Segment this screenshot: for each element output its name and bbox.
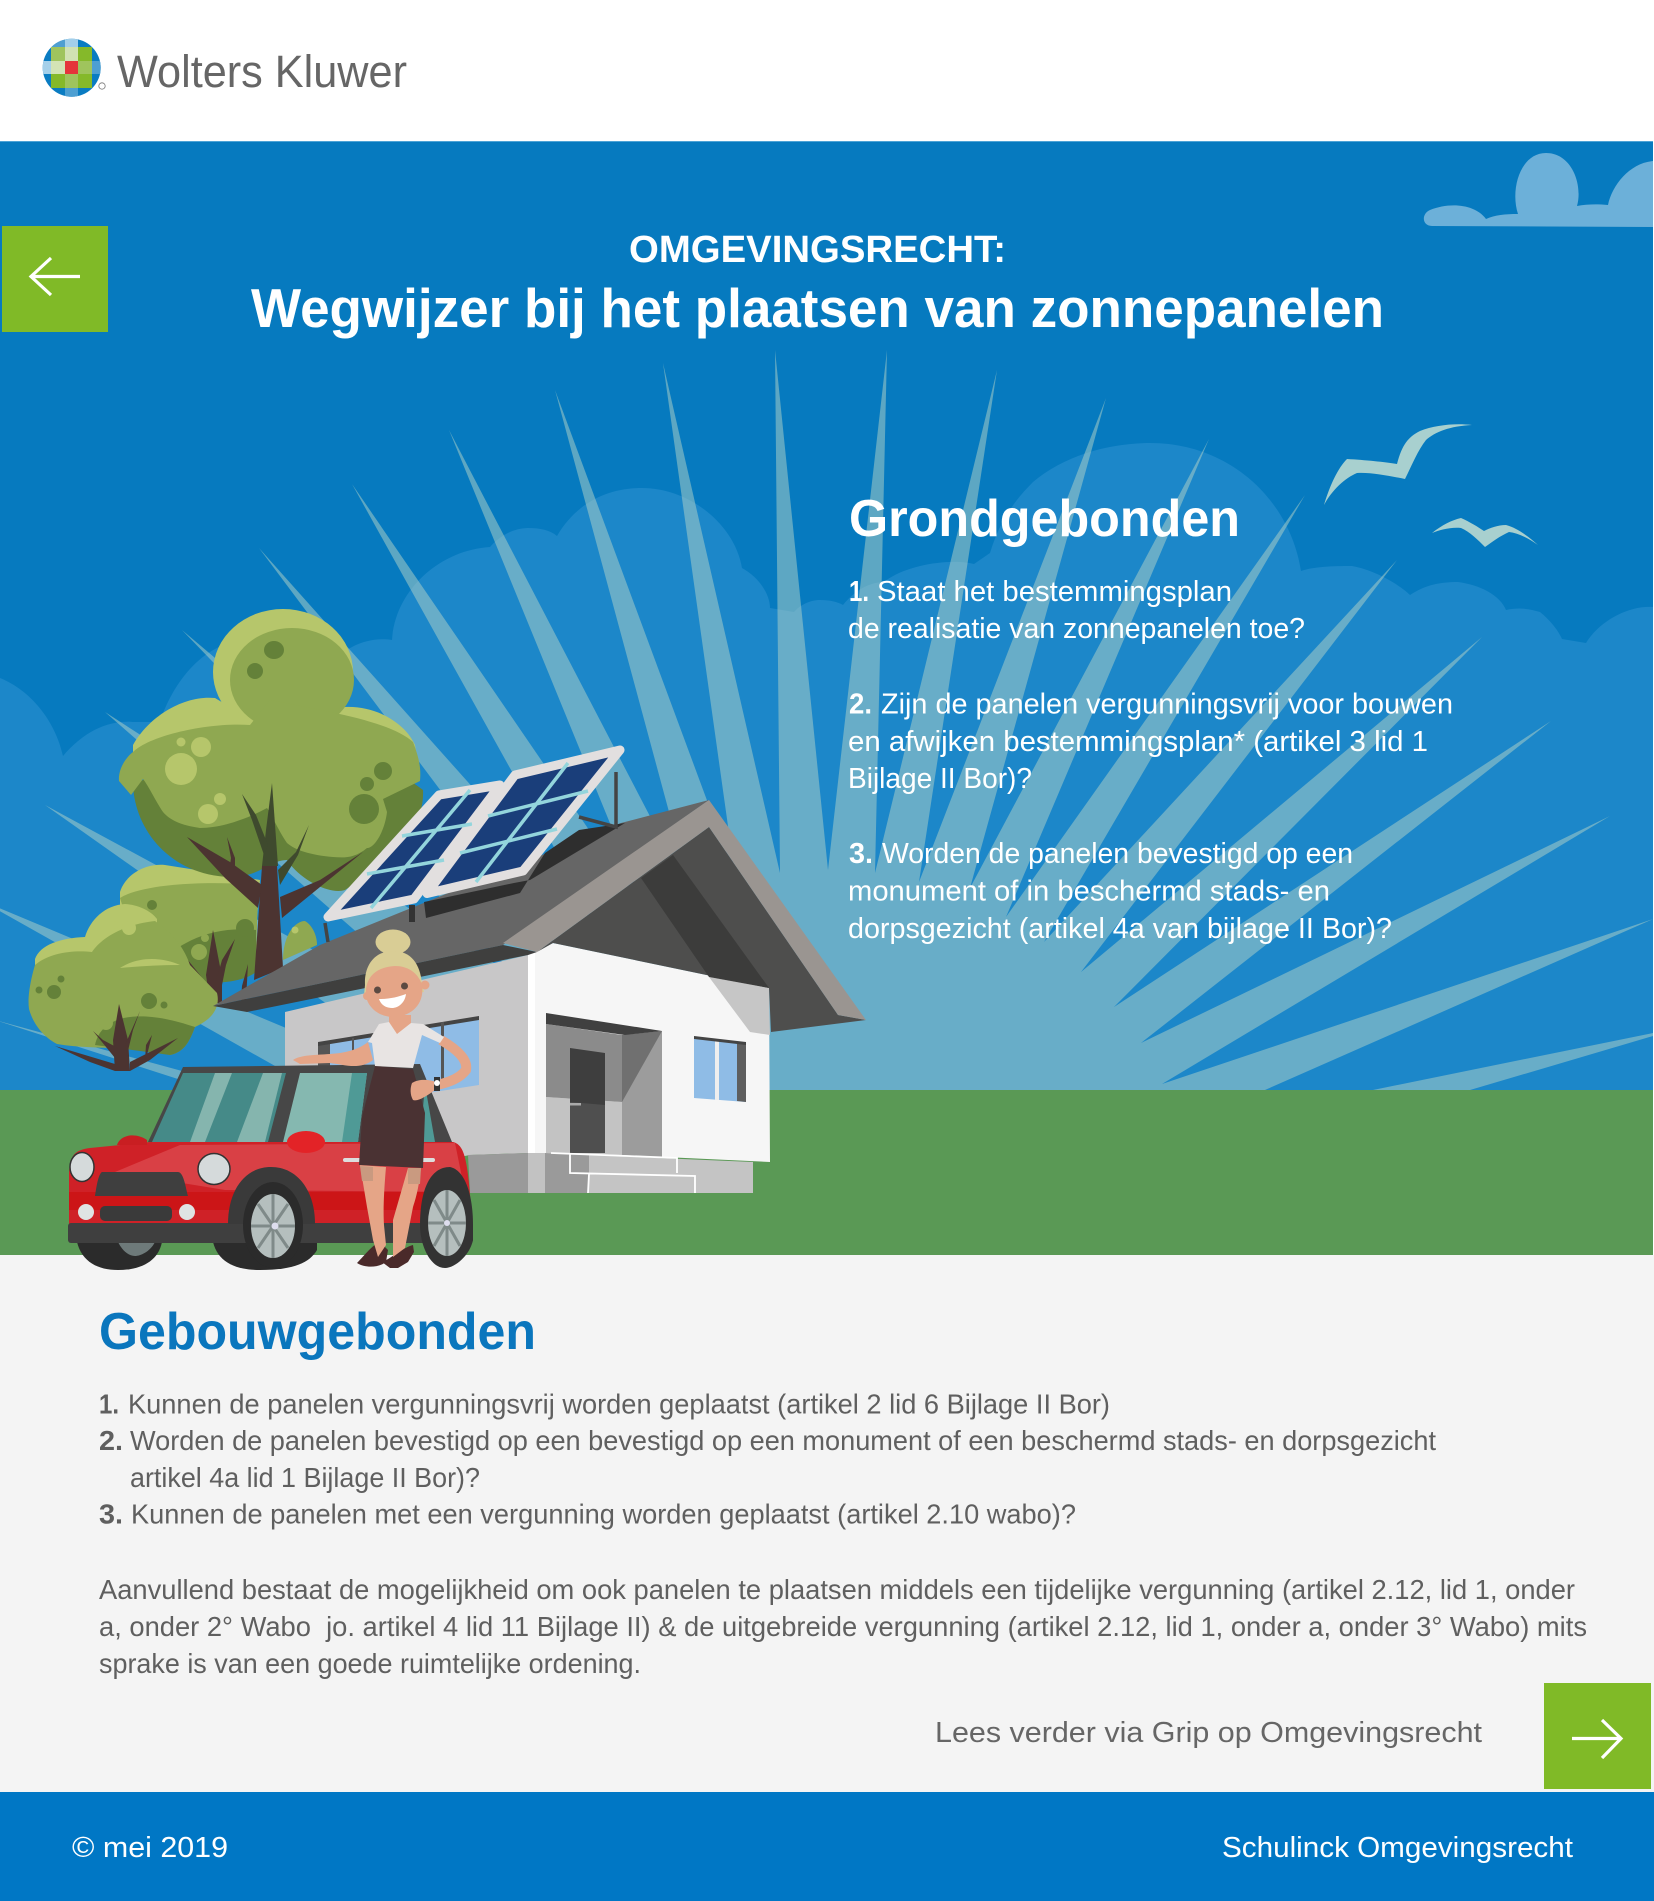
panel mounts [325, 772, 625, 942]
illustration: house [213, 750, 866, 1193]
front wheel [228, 1167, 315, 1268]
panel: Grondgebonden [848, 490, 1453, 945]
mirrors [117, 1135, 147, 1145]
bumper [68, 1223, 473, 1243]
gable underside [537, 827, 866, 1032]
right window [694, 1036, 746, 1102]
panel: grey content background [0, 1255, 1654, 1792]
question 3: 3. [849, 838, 873, 870]
additional paragraph [99, 1574, 1587, 1679]
read more link: Lees verder via Grip op Omgevingsrecht [935, 1717, 1482, 1749]
door [570, 1048, 605, 1153]
question 2: Bijlage II Bor)? [848, 763, 1032, 795]
list item 2: artikel 4a lid 1 Bijlage II Bor)? [130, 1462, 480, 1493]
house base [468, 1153, 753, 1193]
additional paragraph: Aanvullend bestaat de mogelijkheid om ook panelen te plaatsen middels een tijdelijke vergunning (artikel 2.12, lid 1, onder [99, 1574, 1575, 1605]
panel: Gebouwgebonden [99, 1303, 1651, 1789]
question 3: monument of in beschermd stads- en [848, 876, 1330, 908]
icon: large bird [1324, 424, 1472, 505]
icon: middle tree [120, 865, 317, 1003]
entrance [546, 1013, 662, 1157]
steps [551, 1153, 695, 1193]
panel: ground [0, 1090, 1653, 1255]
question 2: 2. [849, 688, 872, 720]
main title: Wegwijzer bij het plaatsen van zonnepanelen [251, 277, 1384, 339]
title kicker: OMGEVINGSRECHT: [629, 229, 1006, 271]
question 1: Staat het bestemmingsplan [877, 576, 1232, 608]
heading: Gebouwgebonden: Gebouwgebonden [99, 1303, 536, 1361]
additional paragraph: sprake is van een goede ruimtelijke ordening. [99, 1648, 641, 1679]
question 3: dorpsgezicht (artikel 4a van bijlage II Bor)? [848, 913, 1392, 945]
windscreen [152, 1073, 286, 1142]
question 2 [848, 688, 1453, 795]
question 3: Worden de panelen bevestigd op een [882, 838, 1353, 870]
heading: Grondgebonden: Grondgebonden [849, 490, 1240, 548]
list item 1: Kunnen de panelen vergunningsvrij worden geplaatst (artikel 2 lid 6 Bijlage II Bor) [128, 1388, 1110, 1420]
back arrow button [2, 226, 108, 332]
additional paragraph: a, onder 2° Wabo jo. artikel 4 lid 11 Bijlage II) & de uitgebreide vergunning (artikel 2.12, lid 1, onder a, onder 3° Wabo) mits [99, 1611, 1587, 1642]
icon: logo globe [42, 38, 105, 98]
question 1: 1. [849, 576, 869, 608]
legs [360, 1165, 421, 1257]
panel right [427, 750, 620, 894]
panel left [328, 785, 500, 917]
car body [69, 1142, 472, 1240]
list item 2: 2. [99, 1425, 123, 1456]
list item 3: 3. [99, 1498, 123, 1530]
footer publisher: Schulinck Omgevingsrecht [1222, 1832, 1573, 1864]
logo: Wolters Kluwer [42, 38, 407, 98]
list item 1: 1. [99, 1388, 119, 1420]
forward arrow button [1544, 1683, 1651, 1789]
logo wordmark: Wolters Kluwer [117, 46, 407, 97]
skirt [359, 1066, 425, 1168]
shoes [357, 1242, 414, 1268]
icon: small bird [1432, 518, 1538, 547]
door window [283, 1073, 367, 1142]
top right cloud [1424, 153, 1653, 227]
headlights [70, 1152, 94, 1182]
door handle [343, 1158, 435, 1162]
shirt [368, 1022, 444, 1068]
house front wall [528, 943, 770, 1162]
list item 2: Worden de panelen bevestigd op een bevestigd op een monument of een beschermd stads- en dorpsgezicht [130, 1425, 1436, 1456]
footer [0, 1792, 1654, 1901]
house left wall [285, 955, 528, 1190]
grille [95, 1172, 188, 1196]
car roof frame [148, 1064, 452, 1142]
footer date: © mei 2019 [72, 1832, 228, 1864]
list item 3: Kunnen de panelen met een vergunning worden geplaatst (artikel 2.10 wabo)? [131, 1498, 1076, 1530]
solar panels [325, 750, 625, 942]
wheels and tyres [77, 1242, 317, 1270]
list item 2 [99, 1425, 1436, 1493]
head [363, 930, 430, 1017]
left window [318, 1016, 479, 1110]
title [251, 229, 1384, 339]
left arm [293, 1042, 373, 1066]
rear wheel [420, 1167, 473, 1268]
question 2: Zijn de panelen vergunningsvrij voor bouwen [881, 688, 1453, 720]
hand and watch [411, 1080, 437, 1100]
neck [389, 1015, 411, 1036]
illustration: red car [68, 1064, 473, 1270]
right arm [437, 1040, 466, 1085]
icon: big tree [119, 609, 423, 980]
sun rays [0, 350, 1653, 1125]
panel: sky [0, 141, 1653, 1125]
question 1: de realisatie van zonnepanelen toe? [848, 613, 1305, 645]
background clouds [0, 443, 1653, 1090]
roof [213, 800, 866, 1020]
icon: small tree [29, 904, 218, 1071]
question 2: en afwijken bestemmingsplan* (artikel 3 lid 1 [848, 726, 1428, 758]
question 3 [848, 838, 1392, 945]
illustration: woman [293, 930, 466, 1268]
question 1 [848, 576, 1305, 645]
